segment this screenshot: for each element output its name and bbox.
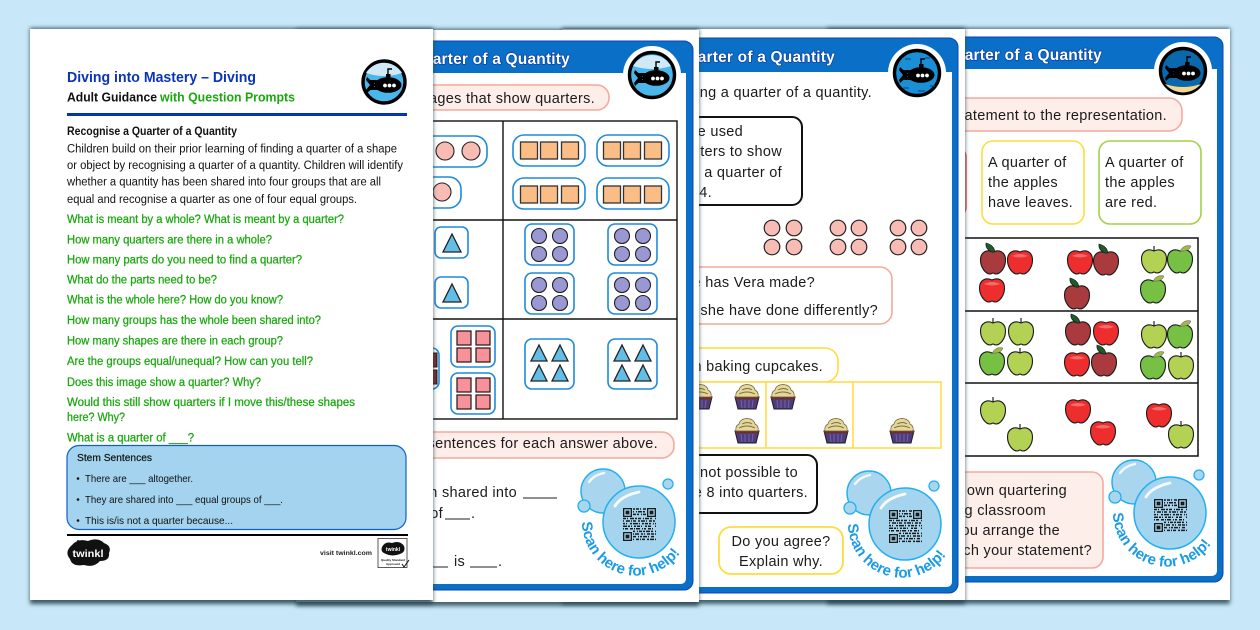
title: Diving into Mastery – Diving	[67, 69, 256, 86]
sheet 1: adult guidance	[30, 28, 433, 604]
instruction: Recognising a quarter of a quantity.	[633, 85, 872, 101]
triangle singles	[435, 227, 468, 308]
question card: of apples using classroom	[871, 503, 1046, 519]
worksheet frame	[585, 38, 958, 593]
circle groups	[400, 136, 487, 208]
question prompts: What is a quarter of ___?	[67, 432, 194, 444]
question prompts: Would this still show quarters if I move this/these shapes	[67, 397, 355, 409]
question prompts: How many shapes are there in each group?	[67, 336, 283, 348]
instruction pill: Circle the images that show quarters.	[345, 91, 595, 107]
question prompts: How many groups has the whole been shared into?	[67, 315, 321, 327]
apples row 3	[980, 397, 1194, 451]
help bubbles with QR code: Scan here for help!	[582, 522, 680, 576]
icon: submarine in deep water	[888, 44, 946, 102]
stem sentences box: Stem Sentences	[77, 452, 152, 464]
triangle fours	[525, 339, 657, 389]
image table	[340, 121, 677, 419]
sentence stems: .	[471, 506, 475, 522]
question card: Can you draw your own quartering	[836, 483, 1067, 499]
prompt box: do you agree: Do you agree?	[731, 534, 831, 550]
question card: objects to match your statement?	[869, 543, 1092, 559]
prompt box: do you agree	[719, 527, 843, 574]
help bubbles with QR code	[1108, 459, 1210, 567]
apples row 1	[980, 243, 1192, 309]
intro text: whether a quantity has been shared into four groups that are all	[66, 176, 381, 188]
approval badge	[378, 538, 409, 568]
worksheet frame	[850, 37, 1223, 582]
sentence pill: Complete the sentences for each answer above.	[333, 436, 658, 452]
statement card: red (hidden)	[880, 147, 966, 217]
question prompts: Does this image show a quarter? Why?	[67, 377, 261, 389]
speech box: Vera: a quarter of	[704, 165, 783, 181]
question prompts: How many parts do you need to find a quarter?	[67, 254, 302, 266]
approval badge: twinkl	[386, 547, 401, 553]
apple table	[870, 238, 1198, 456]
speech box: Vera	[620, 117, 802, 205]
speech box: Vera: I have used	[665, 124, 743, 140]
visit link: visit twinkl.com	[320, 550, 372, 557]
statement card: leaves: the apples	[988, 175, 1058, 191]
sentence stems	[302, 485, 557, 570]
help bubbles with QR code: Scan here for help!	[1113, 513, 1210, 567]
question pill	[609, 267, 892, 324]
question card: objects? Can you arrange the	[861, 523, 1060, 539]
sentence stems: .	[498, 554, 502, 570]
stem sentences box	[67, 446, 406, 530]
instruction pill	[345, 85, 609, 110]
title	[67, 69, 295, 104]
cupcake pill	[605, 348, 838, 382]
speech box: Vera: 24 counters to show	[647, 144, 782, 160]
title: with Question Prompts	[159, 90, 295, 104]
statement card: red apples	[1099, 141, 1201, 224]
help bubbles with QR code	[577, 468, 680, 576]
twinkl logo: twinkl	[72, 548, 104, 560]
question prompts: What do the parts need to be?	[67, 274, 217, 286]
speech box: not possible: share 8 into quarters.	[664, 485, 808, 501]
title: Adult Guidance	[67, 90, 157, 104]
cupcake pill: Ravi has been baking cupcakes.	[605, 359, 823, 375]
sheet 4: match statement worksheet	[825, 24, 1234, 608]
title rule	[67, 113, 407, 116]
prompt box: do you agree: Explain why.	[739, 554, 823, 570]
speech box: not possible	[620, 455, 817, 513]
question prompts: What is the whole here? How do you know?	[67, 294, 283, 306]
intro text: or object by recognising a quarter of a quantity. Children will identify	[67, 160, 403, 172]
sheet 2: image sorting worksheet	[294, 26, 702, 610]
sentence stems: The whole has been shared into	[302, 485, 517, 501]
apples row 2	[980, 314, 1194, 379]
icon: submarine on seabed	[1154, 42, 1212, 100]
sentence stems: groups of	[380, 506, 444, 522]
help bubbles with QR code: Scan here for help!	[848, 524, 946, 578]
intro text	[66, 126, 403, 206]
red squares	[390, 326, 495, 414]
stem sentences box: They are shared into ___ equal groups of ___.	[85, 494, 283, 506]
question prompts	[67, 214, 355, 444]
statement card: red apples: are red.	[1105, 195, 1157, 211]
intro text: equal and recognise a quarter as one of four equal groups.	[67, 194, 357, 206]
statement card: red apples: A quarter of	[1105, 155, 1184, 171]
twinkl logo	[67, 539, 110, 566]
speech box: not possible: It is not possible to	[672, 465, 798, 481]
question card	[836, 472, 1103, 568]
question pill: What mistake has Vera made?	[609, 275, 815, 291]
icon: submarine	[363, 61, 405, 103]
sentence pill	[333, 432, 674, 458]
question prompts: here? Why?	[67, 412, 125, 424]
instruction pill: Match the statement to the representation.	[882, 108, 1167, 124]
question prompts: How many quarters are there in a whole?	[67, 234, 272, 246]
statement card: leaves: have leaves.	[988, 195, 1073, 211]
worksheet frame	[320, 41, 693, 590]
sheet 3: cupcakes worksheet	[560, 24, 968, 608]
square groups	[513, 135, 669, 209]
header title: Quarter of a Quantity	[943, 47, 1102, 64]
cupcake table	[620, 382, 941, 448]
footer rule	[67, 534, 408, 536]
statement card: leaves	[982, 141, 1084, 224]
sentence stems: is	[454, 554, 465, 570]
circle fours	[525, 224, 657, 314]
speech box: Vera: 24.	[691, 185, 712, 201]
header title: Quarter of a Quantity	[411, 51, 570, 68]
statement card: leaves: A quarter of	[988, 155, 1067, 171]
intro text: Children build on their prior learning of finding a quarter of a shape	[67, 144, 397, 156]
intro text: Recognise a Quarter of a Quantity	[67, 126, 238, 138]
help bubbles with QR code	[843, 470, 946, 578]
question prompts: What is meant by a whole? What is meant by a quarter?	[67, 214, 344, 226]
counters	[764, 220, 927, 255]
stem sentences box: There are ___ altogether.	[85, 473, 193, 485]
approval badge: Quality Standard	[381, 558, 405, 562]
question prompts: Are the groups equal/unequal? How can you tell?	[67, 356, 313, 368]
icon: submarine near surface	[623, 46, 681, 104]
header title: Quarter of a Quantity	[676, 49, 835, 66]
approval badge: Approved	[386, 562, 400, 566]
instruction pill	[850, 98, 1182, 131]
question pill: What could she have done differently?	[620, 303, 878, 319]
stem sentences box: This is/is not a quarter because...	[85, 515, 233, 527]
statement card: red apples: the apples	[1105, 175, 1175, 191]
